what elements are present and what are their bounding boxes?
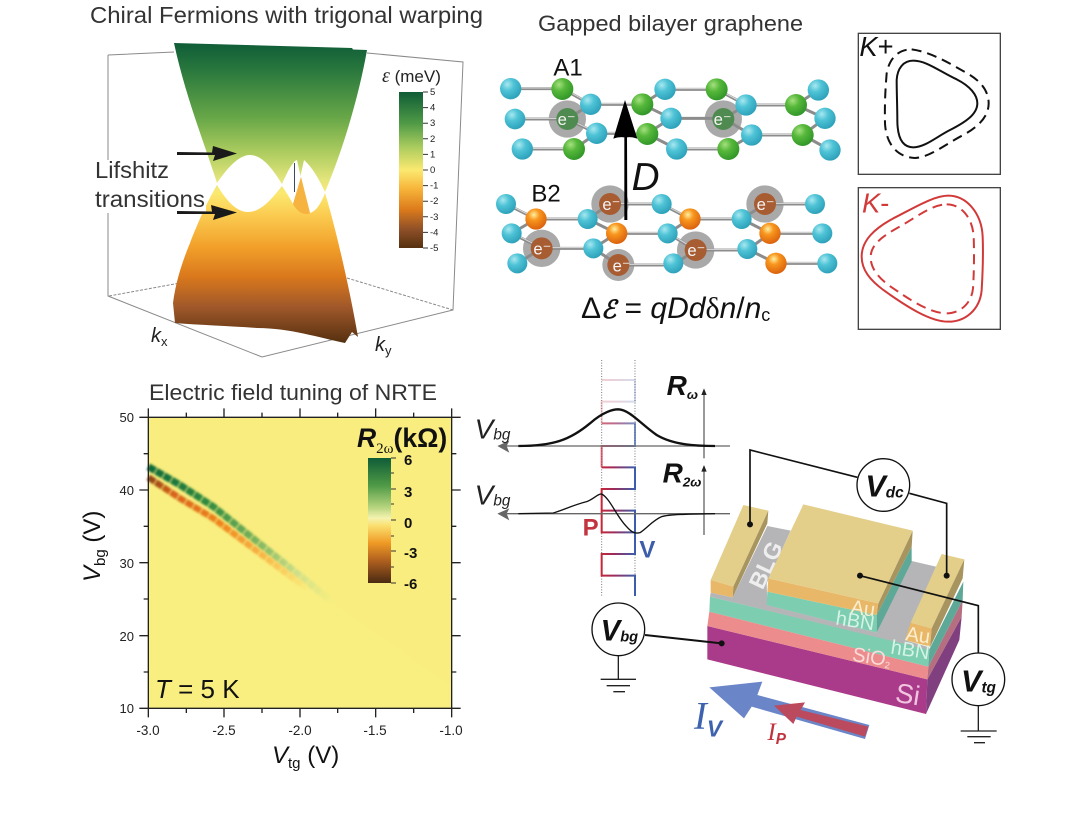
Vdc voltmeter and wires xyxy=(747,450,950,579)
colour bar R2omega: 0 xyxy=(404,515,412,532)
charged atoms with electrons: e⁻ xyxy=(613,256,631,275)
x axis title: (V) xyxy=(301,742,339,769)
energy colour bar: 3 xyxy=(430,118,435,129)
panel: NRTE colour map xyxy=(79,380,463,772)
upper band surface xyxy=(174,43,367,192)
panel: Fermi contours xyxy=(858,31,1000,329)
label Vbg upper: V xyxy=(475,414,493,445)
layer labels: hBN xyxy=(889,637,931,664)
y tick labels: 30 xyxy=(120,556,134,571)
layer labels: Si xyxy=(893,677,922,711)
x tick labels: -2.5 xyxy=(212,723,236,738)
panel: chiral fermions band structure xyxy=(90,2,483,358)
title: gapped bilayer graphene: Gapped bilayer graphene xyxy=(538,11,803,36)
energy colour bar: -1 xyxy=(430,181,438,192)
label D: D xyxy=(632,156,660,199)
B2 atoms xyxy=(525,208,787,274)
R 2omega axes xyxy=(497,465,730,535)
y axis title: (V) xyxy=(79,511,106,549)
K- contour box: K- xyxy=(862,187,889,218)
dotted guide lines xyxy=(602,360,635,597)
back gate voltmeter: V xyxy=(601,615,620,648)
label B2: B2 xyxy=(531,180,561,207)
black line inside hole xyxy=(294,163,296,192)
axis label kx: x xyxy=(161,334,168,349)
label R 2omega: R xyxy=(663,457,683,488)
energy colour bar: -4 xyxy=(430,227,438,238)
label IP: P xyxy=(776,731,787,748)
charged atoms with electrons: e⁻ xyxy=(558,110,576,129)
charged atoms with electrons: e⁻ xyxy=(533,240,551,259)
arrow: lower Lifshitz point xyxy=(177,205,237,220)
label Vbg upper: bg xyxy=(493,426,511,443)
colour bar R2omega: -3 xyxy=(404,545,417,562)
gate voltage pulse train xyxy=(602,380,635,596)
energy colour bar: 4 xyxy=(430,103,435,114)
layer labels xyxy=(744,537,932,711)
orange band xyxy=(148,477,307,588)
lower band surface xyxy=(173,177,358,343)
K+ contour box xyxy=(858,31,1000,174)
energy colour bar: 5 xyxy=(430,87,435,98)
bilayer graphene sheet xyxy=(710,526,936,650)
temperature label: T = 5 K xyxy=(155,674,240,704)
heat map xyxy=(139,408,461,717)
lower hBN layer xyxy=(709,582,963,667)
charged atoms with electrons: e⁻ xyxy=(757,195,775,214)
curve R omega xyxy=(518,409,715,446)
lattice diagram xyxy=(496,54,841,281)
panel: pulse and resistance curves xyxy=(475,360,730,692)
label Vbg lower: V xyxy=(475,480,493,511)
K- contour box xyxy=(858,187,1000,329)
arrow: displacement field D xyxy=(613,100,637,220)
x tick labels: -1.0 xyxy=(439,723,463,738)
Vtg voltmeter and wires: tg xyxy=(981,680,997,697)
Vdc voltmeter and wires: dc xyxy=(886,485,904,502)
layer labels: Au xyxy=(904,623,932,648)
charged atoms with electrons: e⁻ xyxy=(687,241,705,260)
label V: V xyxy=(639,537,655,564)
axis label kx: k xyxy=(151,325,161,347)
K+ contour box: K+ xyxy=(859,31,894,62)
energy colour bar: 1 xyxy=(430,149,435,160)
Vtg voltmeter and wires: V xyxy=(961,665,981,699)
Vdc voltmeter and wires: V xyxy=(865,470,886,504)
orange pocket shading xyxy=(293,177,310,214)
carbon atoms, sublattice B1 and A2 xyxy=(496,78,841,273)
y tick labels: 10 xyxy=(120,701,134,716)
y axis title: V xyxy=(79,564,106,582)
layer labels: hBN xyxy=(834,608,876,635)
bonds xyxy=(506,88,830,265)
equation: c xyxy=(761,305,770,325)
green band xyxy=(148,467,333,603)
electron halos xyxy=(523,100,784,281)
label: Lifshitz transitions: Lifshitz xyxy=(95,157,169,183)
back gate wire and contact dot xyxy=(645,635,725,646)
title: chiral fermions: Chiral Fermions with trigonal warping xyxy=(90,2,483,28)
back gate voltmeter: bg xyxy=(620,630,638,646)
panel: gapped bilayer graphene xyxy=(496,11,841,325)
colour bar R2omega: (kΩ) xyxy=(394,423,447,453)
charged atoms with electrons: e⁻ xyxy=(714,110,732,129)
x axis title: tg xyxy=(288,755,301,772)
energy colour bar xyxy=(382,65,441,254)
axis label ky: y xyxy=(385,343,392,358)
x tick labels: -2.0 xyxy=(288,723,312,738)
left Au contact xyxy=(711,505,768,597)
label P: P xyxy=(583,514,599,541)
x tick labels: -3.0 xyxy=(136,723,160,738)
energy colour bar: ε (meV) xyxy=(382,65,441,87)
colour bar R2omega: -6 xyxy=(404,576,417,593)
3D axes box xyxy=(108,52,463,357)
label IV: I xyxy=(694,695,707,737)
equation: Δℰ = qDdδn/n xyxy=(581,292,761,325)
label IV: V xyxy=(707,715,724,741)
y tick labels: 50 xyxy=(120,410,134,425)
right Au contact xyxy=(905,554,964,647)
A1 atoms xyxy=(551,78,814,160)
charged atoms with electrons xyxy=(531,108,776,276)
x tick labels xyxy=(136,723,463,738)
energy colour bar: -2 xyxy=(430,196,438,207)
energy colour bar: 0 xyxy=(430,165,435,176)
colour bar R2omega xyxy=(357,423,447,593)
back gate voltmeter xyxy=(592,603,645,692)
label Vbg lower: bg xyxy=(493,492,511,509)
colour bar R2omega: 3 xyxy=(404,484,412,501)
energy colour bar: 2 xyxy=(430,134,435,145)
label: Lifshitz transitions xyxy=(94,157,206,212)
top gate stack xyxy=(767,504,913,633)
SiO2 layer xyxy=(707,600,963,679)
R omega axes xyxy=(497,388,730,458)
label R 2omega: 2ω xyxy=(682,474,701,489)
layer labels: Au xyxy=(849,596,877,622)
layer labels: 2 xyxy=(884,660,891,671)
panel: device stack schematic xyxy=(645,450,1005,748)
curve R 2omega xyxy=(518,494,715,533)
label IP: I xyxy=(767,718,776,746)
y tick labels xyxy=(120,410,134,716)
plot frame and ticks xyxy=(139,408,461,717)
label R omega: ω xyxy=(687,387,698,402)
Vtg voltmeter and wires xyxy=(857,573,1005,743)
y axis title: bg xyxy=(92,549,109,566)
colour bar R2omega: R xyxy=(357,423,376,453)
charged atoms with electrons: e⁻ xyxy=(602,195,620,214)
current arrow IP xyxy=(774,702,868,737)
current arrow IV xyxy=(709,682,869,739)
colour bar R2omega: 2ω xyxy=(376,441,394,457)
arrow: upper Lifshitz point xyxy=(177,146,237,161)
y tick labels: 20 xyxy=(120,629,134,644)
silicon layer xyxy=(707,617,962,714)
layer labels: BLG xyxy=(744,537,788,593)
energy colour bar: -5 xyxy=(430,243,438,254)
x axis title: V xyxy=(272,742,290,769)
colour bar R2omega: 6 xyxy=(404,452,412,469)
energy colour bar: -3 xyxy=(430,212,438,223)
title: electric field tuning: Electric field tuning of NRTE xyxy=(149,380,437,405)
x tick labels: -1.5 xyxy=(363,723,387,738)
label A1: A1 xyxy=(553,54,583,81)
y tick labels: 40 xyxy=(120,483,134,498)
label R omega: R xyxy=(667,370,687,401)
axis label ky: k xyxy=(375,334,385,356)
label: Lifshitz transitions: transitions xyxy=(95,186,205,212)
layer labels: SiO xyxy=(851,644,887,671)
